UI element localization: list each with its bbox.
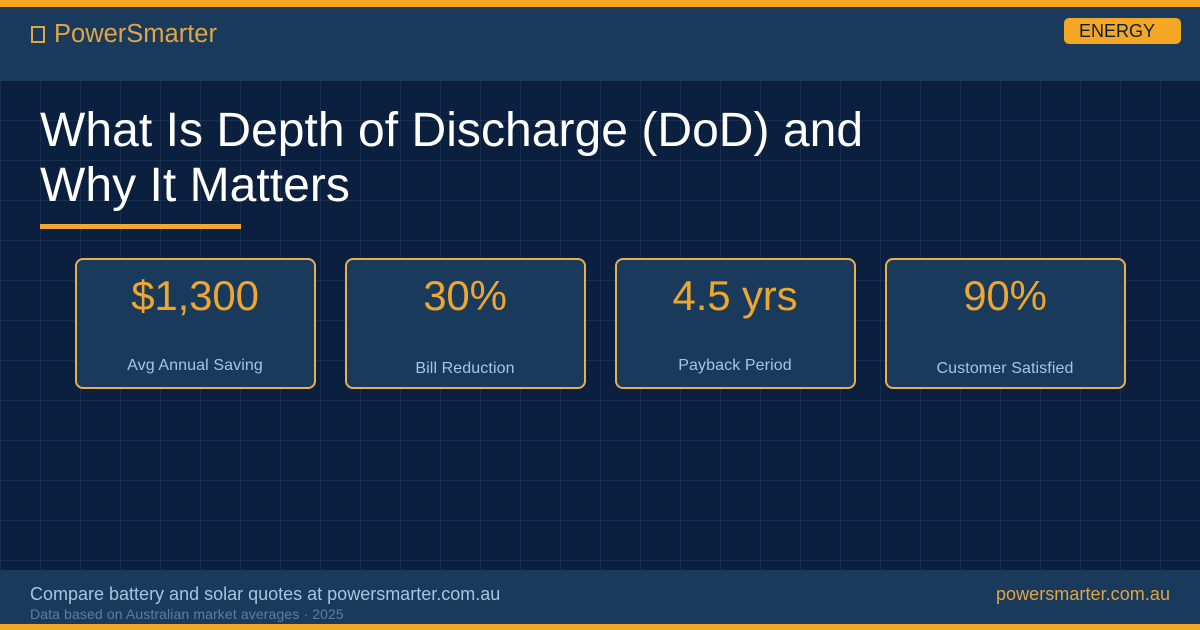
bottom accent bar	[0, 624, 1200, 630]
stat card: bill reduction	[345, 258, 586, 389]
title	[40, 104, 863, 212]
brand logo: PowerSmarter	[54, 20, 217, 48]
stat value: 4.5 yrs	[672, 272, 798, 319]
stat label: Payback Period	[678, 357, 792, 374]
data source note: Data based on Australian market averages · 2025	[30, 606, 344, 622]
stat value: 30%	[423, 272, 507, 319]
title underline	[40, 224, 241, 229]
top accent bar	[0, 0, 1200, 7]
website link: powersmarter.com.au	[996, 584, 1170, 604]
category badge	[1064, 18, 1181, 44]
stat label: Avg Annual Saving	[127, 357, 263, 374]
title: What Is Depth of Discharge (DoD) and	[40, 104, 863, 157]
stat value: 90%	[963, 272, 1047, 319]
stat card: payback period	[615, 258, 856, 389]
footer band	[0, 570, 1200, 630]
title: Why It Matters	[40, 159, 350, 212]
stat label: Customer Satisfied	[937, 360, 1073, 377]
stat value: $1,300	[131, 272, 259, 319]
category badge: ENERGY	[1079, 21, 1155, 41]
call to action: Compare battery and solar quotes at powersmarter.com.au	[30, 584, 500, 604]
stat card: customer satisfied	[885, 258, 1126, 389]
header band	[0, 0, 1200, 81]
stat card: average annual saving	[75, 258, 316, 389]
stat label: Bill Reduction	[415, 360, 515, 377]
